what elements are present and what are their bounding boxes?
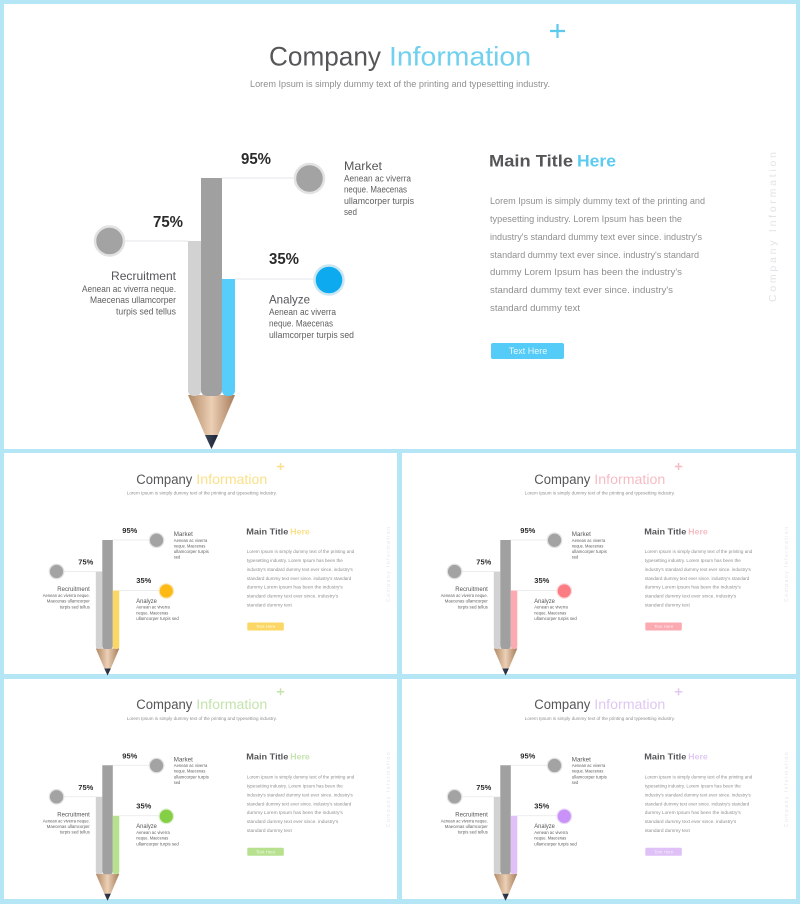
circles: green slide <box>49 758 174 824</box>
panel: pink slide <box>402 453 796 676</box>
callouts: green slide: Aenean ac viverra <box>136 830 170 835</box>
callouts: purple slide: neque. Maecenas <box>572 769 604 774</box>
callouts: green slide: ullamcorper turpis <box>174 774 210 779</box>
percent labels: yellow slide <box>78 526 151 585</box>
paragraph: pink slide: industry's standard dummy text ever since. industry's <box>645 567 751 572</box>
text: recruitment: Recruitment <box>111 269 177 283</box>
paragraph: standard dummy text ever since. industry's <box>490 285 673 295</box>
heading: purple slide <box>644 752 708 762</box>
title: yellow: Company <box>136 472 193 487</box>
callouts: purple slide <box>441 757 608 846</box>
callouts: purple slide: Maecenas ullamcorper <box>445 824 488 829</box>
callouts: purple slide: ullamcorper turpis <box>572 774 608 779</box>
percent labels: purple slide: 75% <box>476 783 491 792</box>
paragraph: green slide: standard dummy text ever since. industry's standard <box>247 801 352 806</box>
callouts: green slide: Aenean ac viverra neque. <box>43 818 90 823</box>
callouts: green slide: neque. Maecenas <box>174 769 206 774</box>
callouts: pink slide: Maecenas ullamcorper <box>445 598 488 604</box>
heading: pink slide: Here <box>688 526 708 536</box>
title: yellow <box>136 472 267 487</box>
title: yellow: Information <box>196 472 267 487</box>
paragraph: yellow slide: Lorem Ipsum is simply dummy text of the printing and <box>247 549 355 554</box>
title: Company <box>269 42 381 72</box>
paragraph: green slide: typesetting industry. Lorem Ipsum has been the <box>247 783 343 788</box>
paragraph: dummy Lorem Ipsum has been the industry's <box>490 267 682 277</box>
button: purple slide <box>645 848 682 856</box>
paragraph: yellow slide: typesetting industry. Lorem Ipsum has been the <box>247 558 343 563</box>
title <box>269 42 531 72</box>
paragraph: purple slide: standard dummy text ever since. industry's standard <box>645 801 750 806</box>
icon: market circle <box>295 164 324 193</box>
paragraph: yellow slide: standard dummy text ever since. industry's <box>247 594 339 598</box>
callouts: pink slide: Analyze <box>534 599 555 605</box>
paragraph: standard dummy text ever since. industry's standard <box>490 250 699 260</box>
percent labels: purple slide: 35% <box>534 801 549 810</box>
callouts: yellow slide: sed <box>174 554 181 560</box>
callouts: pink slide: Aenean ac viverra <box>534 604 568 610</box>
callouts: green slide: Aenean ac viverra <box>174 763 208 768</box>
title: purple: Company <box>534 697 591 712</box>
percent labels: purple slide <box>476 751 549 810</box>
paragraph: pink slide: dummy Lorem Ipsum has been the industry's <box>645 584 742 590</box>
panel: purple slide <box>402 679 796 901</box>
callouts: yellow slide: Analyze <box>136 599 157 605</box>
text: market: Aenean ac viverra <box>344 174 411 184</box>
callouts: pink slide: Recruitment <box>455 587 488 593</box>
label: 95%: 95% <box>241 151 271 168</box>
text: analyze <box>269 292 354 340</box>
callouts: yellow slide <box>43 532 210 621</box>
paragraph: purple slide: industry's standard dummy text ever since. industry's <box>645 792 751 797</box>
title: green: Information <box>196 697 267 712</box>
callouts: yellow slide: turpis sed tellus <box>60 604 91 609</box>
panel: yellow slide <box>4 453 397 676</box>
callouts: purple slide: Aenean ac viverra <box>572 763 606 768</box>
callouts: yellow slide: Recruitment <box>57 587 90 593</box>
vertical label: pink slide: Company Information <box>784 527 790 602</box>
title: purple <box>534 697 665 712</box>
label: 75%: 75% <box>153 214 183 231</box>
text: market: ullamcorper turpis <box>344 196 414 206</box>
callouts: pink slide: Market <box>572 532 591 538</box>
text: market: sed <box>344 207 357 217</box>
callouts: green slide <box>43 757 210 846</box>
title: green <box>136 697 267 712</box>
text: analyze: ullamcorper turpis sed <box>269 330 354 340</box>
heading: purple slide: Here <box>688 752 708 762</box>
percent labels: green slide: 35% <box>136 801 151 810</box>
label: 35%: 35% <box>269 251 299 268</box>
pencil chart: purple <box>462 765 557 901</box>
subtitle: green slide: Lorem Ipsum is simply dummy text of the printing and typesetting industry. <box>127 716 277 722</box>
percent labels: yellow slide: 75% <box>78 558 93 566</box>
callouts: purple slide: Aenean ac viverra <box>534 830 568 835</box>
callouts: purple slide: turpis sed tellus <box>458 830 489 835</box>
heading: pink slide: Main Title <box>644 526 687 536</box>
circles: yellow slide <box>49 533 174 598</box>
text: market <box>344 159 414 217</box>
button: pink slide <box>645 622 682 630</box>
heading: main title: Here <box>577 152 616 170</box>
callouts: yellow slide: neque. Maecenas <box>136 610 169 615</box>
circles: purple slide <box>447 758 572 824</box>
paragraph: pink slide <box>645 549 753 608</box>
paragraph: Lorem Ipsum is simply dummy text of the printing and <box>490 196 705 206</box>
icon: plus <box>550 24 565 38</box>
heading: yellow slide: Here <box>290 526 310 536</box>
paragraph: purple slide <box>645 774 753 833</box>
vertical label: yellow slide: Company Information <box>386 527 392 602</box>
subtitle: yellow slide: Lorem Ipsum is simply dummy text of the printing and typesetting industry. <box>127 490 277 496</box>
title: purple: Information <box>594 697 665 712</box>
callouts: pink slide: turpis sed tellus <box>458 604 489 609</box>
paragraph: green slide: dummy Lorem Ipsum has been the industry's <box>247 810 344 815</box>
paragraph: purple slide: typesetting industry. Lorem Ipsum has been the <box>645 783 741 788</box>
callouts: yellow slide: Maecenas ullamcorper <box>47 598 90 604</box>
text: recruitment: Maecenas ullamcorper <box>90 295 176 305</box>
text: recruitment: Aenean ac viverra neque. <box>82 284 176 294</box>
panel: main blue slide <box>4 4 796 449</box>
callouts: green slide: sed <box>174 780 181 785</box>
paragraph: yellow slide: standard dummy text ever since. industry's standard <box>247 576 352 581</box>
icon: pink plus <box>675 463 682 470</box>
callouts: green slide: Maecenas ullamcorper <box>47 824 90 829</box>
vertical label: purple slide: Company Information <box>784 752 790 827</box>
callouts: yellow slide: ullamcorper turpis <box>174 549 210 554</box>
percent labels: green slide <box>78 751 151 810</box>
subtitle: purple slide: Lorem Ipsum is simply dummy text of the printing and typesetting industry. <box>525 716 675 722</box>
callouts: green slide: turpis sed tellus <box>60 830 91 835</box>
text: analyze: Aenean ac viverra <box>269 307 336 317</box>
paragraph: green slide: Lorem Ipsum is simply dummy text of the printing and <box>247 774 355 779</box>
callouts: purple slide: neque. Maecenas <box>534 836 567 841</box>
callouts: yellow slide: Aenean ac viverra <box>136 604 170 610</box>
title: pink: Company <box>534 472 591 487</box>
callouts: purple slide: Aenean ac viverra neque. <box>441 818 488 823</box>
percent labels: green slide: 95% <box>122 751 137 760</box>
heading: green slide <box>246 752 310 762</box>
button: green slide <box>247 848 284 856</box>
heading: main title: Main Title <box>489 152 573 170</box>
title: pink <box>534 472 665 487</box>
percent labels: yellow slide: 35% <box>136 576 151 585</box>
button: Text Here <box>509 346 547 356</box>
vertical label: Company Information <box>767 152 779 302</box>
callouts: pink slide: Aenean ac viverra neque. <box>441 593 488 598</box>
callouts: pink slide: ullamcorper turpis sed <box>534 616 577 621</box>
callouts: pink slide: ullamcorper turpis <box>572 549 608 554</box>
pencil chart: green <box>64 765 159 901</box>
paragraph: green slide <box>247 774 355 833</box>
percent labels: pink slide: 75% <box>476 558 491 566</box>
callouts: purple slide: sed <box>572 780 579 785</box>
paragraph: standard dummy text <box>490 303 580 313</box>
heading: green slide: Main Title <box>246 752 289 762</box>
callouts: green slide: Market <box>174 757 193 763</box>
button <box>491 343 564 359</box>
callouts: yellow slide: Market <box>174 532 193 538</box>
percent labels: pink slide <box>476 526 549 585</box>
paragraph: yellow slide <box>247 549 355 608</box>
paragraph: yellow slide: dummy Lorem Ipsum has been the industry's <box>247 584 344 590</box>
percent labels: pink slide: 35% <box>534 576 549 585</box>
callouts: purple slide: ullamcorper turpis sed <box>534 841 577 846</box>
callouts: green slide: Recruitment <box>57 812 90 818</box>
icon: green plus <box>277 688 284 695</box>
paragraph: pink slide: Lorem Ipsum is simply dummy text of the printing and <box>645 549 753 554</box>
button: green slide: Text Here <box>256 849 276 854</box>
percent labels: green slide: 75% <box>78 783 93 792</box>
paragraph: purple slide: standard dummy text ever since. industry's <box>645 819 737 824</box>
paragraph: typesetting industry. Lorem Ipsum has been the <box>490 214 682 224</box>
callouts: pink slide: sed <box>572 554 579 560</box>
callouts: pink slide: Aenean ac viverra <box>572 538 606 543</box>
paragraph: purple slide: dummy Lorem Ipsum has been the industry's <box>645 810 742 815</box>
paragraph: green slide: industry's standard dummy text ever since. industry's <box>247 792 353 797</box>
icon: analyze circle <box>314 266 344 294</box>
paragraph: pink slide: standard dummy text ever since. industry's standard <box>645 576 750 581</box>
text: market: neque. Maecenas <box>344 184 407 194</box>
paragraph: purple slide: standard dummy text <box>645 828 691 833</box>
paragraph: green slide: standard dummy text <box>247 828 293 833</box>
paragraph: purple slide: Lorem Ipsum is simply dummy text of the printing and <box>645 774 753 779</box>
callouts: pink slide: neque. Maecenas <box>534 610 567 615</box>
text: recruitment <box>82 269 177 316</box>
heading: purple slide: Main Title <box>644 752 687 762</box>
subtitle: Lorem Ipsum is simply dummy text of the printing and typesetting industry. <box>250 79 550 90</box>
callouts: green slide: Analyze <box>136 824 157 830</box>
paragraph: yellow slide: industry's standard dummy text ever since. industry's <box>247 567 353 572</box>
callouts: purple slide: Analyze <box>534 824 555 830</box>
button: pink slide: Text Here <box>654 624 674 629</box>
button: yellow slide: Text Here <box>256 624 276 629</box>
callouts: green slide: ullamcorper turpis sed <box>136 841 179 846</box>
subtitle: pink slide: Lorem Ipsum is simply dummy text of the printing and typesetting industry. <box>525 490 675 496</box>
percent labels: purple slide: 95% <box>520 751 535 760</box>
text: analyze: Analyze <box>269 292 310 306</box>
pencil chart: pink <box>462 540 557 676</box>
heading: yellow slide <box>246 526 310 536</box>
percent labels: yellow slide: 95% <box>122 526 137 535</box>
icon: yellow plus <box>277 463 284 470</box>
heading: pink slide <box>644 526 708 536</box>
paragraph: yellow slide: standard dummy text <box>247 602 293 608</box>
pencil chart: yellow <box>64 540 159 676</box>
heading: main title <box>489 152 616 170</box>
callouts: pink slide: neque. Maecenas <box>572 543 604 548</box>
text: analyze: neque. Maecenas <box>269 318 333 328</box>
heading: green slide: Here <box>290 752 310 762</box>
icon: purple plus <box>675 688 682 695</box>
callouts: pink slide <box>441 532 608 621</box>
callouts: yellow slide: ullamcorper turpis sed <box>136 616 179 621</box>
heading: yellow slide: Main Title <box>246 526 289 536</box>
callouts: green slide: neque. Maecenas <box>136 836 169 841</box>
paragraph: industry's standard dummy text ever since. industry's <box>490 232 702 242</box>
callouts: purple slide: Recruitment <box>455 812 488 818</box>
callouts: yellow slide: neque. Maecenas <box>174 543 206 548</box>
button: purple slide: Text Here <box>654 849 674 854</box>
callouts: yellow slide: Aenean ac viverra <box>174 538 208 543</box>
title: green: Company <box>136 697 193 712</box>
circles: pink slide <box>447 533 572 598</box>
panel: green slide <box>4 679 397 901</box>
text: market: Market <box>344 159 383 173</box>
title: Information <box>389 42 531 72</box>
callouts: yellow slide: Aenean ac viverra neque. <box>43 593 90 598</box>
percent labels: pink slide: 95% <box>520 526 535 535</box>
vertical label: green slide: Company Information <box>386 752 392 827</box>
icon: recruitment circle <box>95 226 124 256</box>
paragraph <box>490 196 705 313</box>
title: pink: Information <box>594 472 665 487</box>
pencil chart <box>125 178 315 449</box>
callouts: purple slide: Market <box>572 757 591 763</box>
paragraph: pink slide: standard dummy text <box>645 602 691 608</box>
paragraph: pink slide: standard dummy text ever since. industry's <box>645 594 737 598</box>
text: recruitment: turpis sed tellus <box>116 306 176 316</box>
paragraph: green slide: standard dummy text ever since. industry's <box>247 819 339 824</box>
paragraph: pink slide: typesetting industry. Lorem Ipsum has been the <box>645 558 741 563</box>
button: yellow slide <box>247 622 284 630</box>
